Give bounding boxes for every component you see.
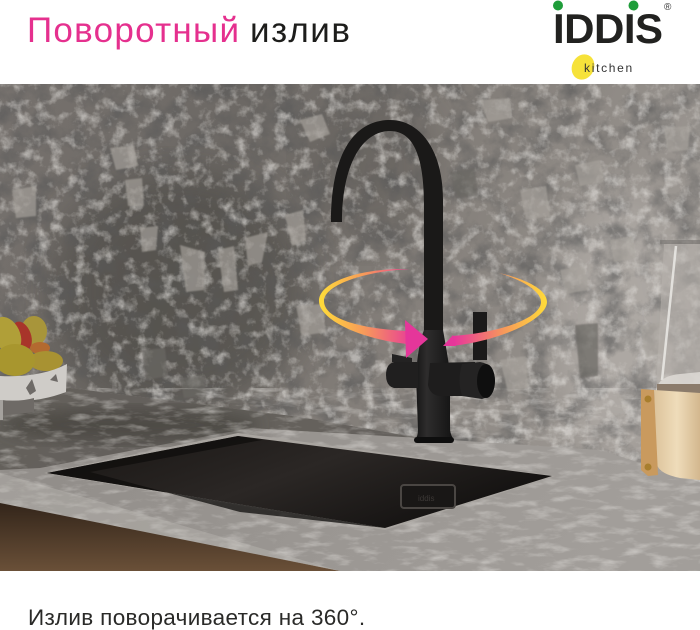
wooden cabinet <box>0 503 340 571</box>
logo: IDDIS kitchen <box>553 0 672 83</box>
logo: IDDIS kitchen: ® <box>664 2 672 13</box>
glass carafe with leather sleeve <box>641 240 700 480</box>
right body <box>428 362 475 396</box>
left handle <box>392 354 412 362</box>
fruit bowl with pears <box>0 312 67 420</box>
title: излив <box>250 11 350 50</box>
logo: IDDIS kitchen: IDDIS <box>553 5 663 52</box>
logo: IDDIS kitchen: kitchen <box>584 61 634 75</box>
drain cover: iddis <box>418 494 434 503</box>
sink basin <box>44 433 555 530</box>
title: Поворотный <box>27 11 239 50</box>
faucet <box>331 120 495 443</box>
stone wall <box>0 84 700 484</box>
countertop <box>0 388 700 571</box>
caption: Излив поворачивается на 360°. <box>28 605 365 630</box>
spout <box>331 120 443 345</box>
drain cover <box>401 485 455 508</box>
photo: kitchen scene <box>0 84 700 571</box>
stem <box>415 330 454 440</box>
rotation arrow: right arc with arrowhead <box>443 273 547 346</box>
rotation arrow: left arc with arrowhead <box>319 269 428 358</box>
